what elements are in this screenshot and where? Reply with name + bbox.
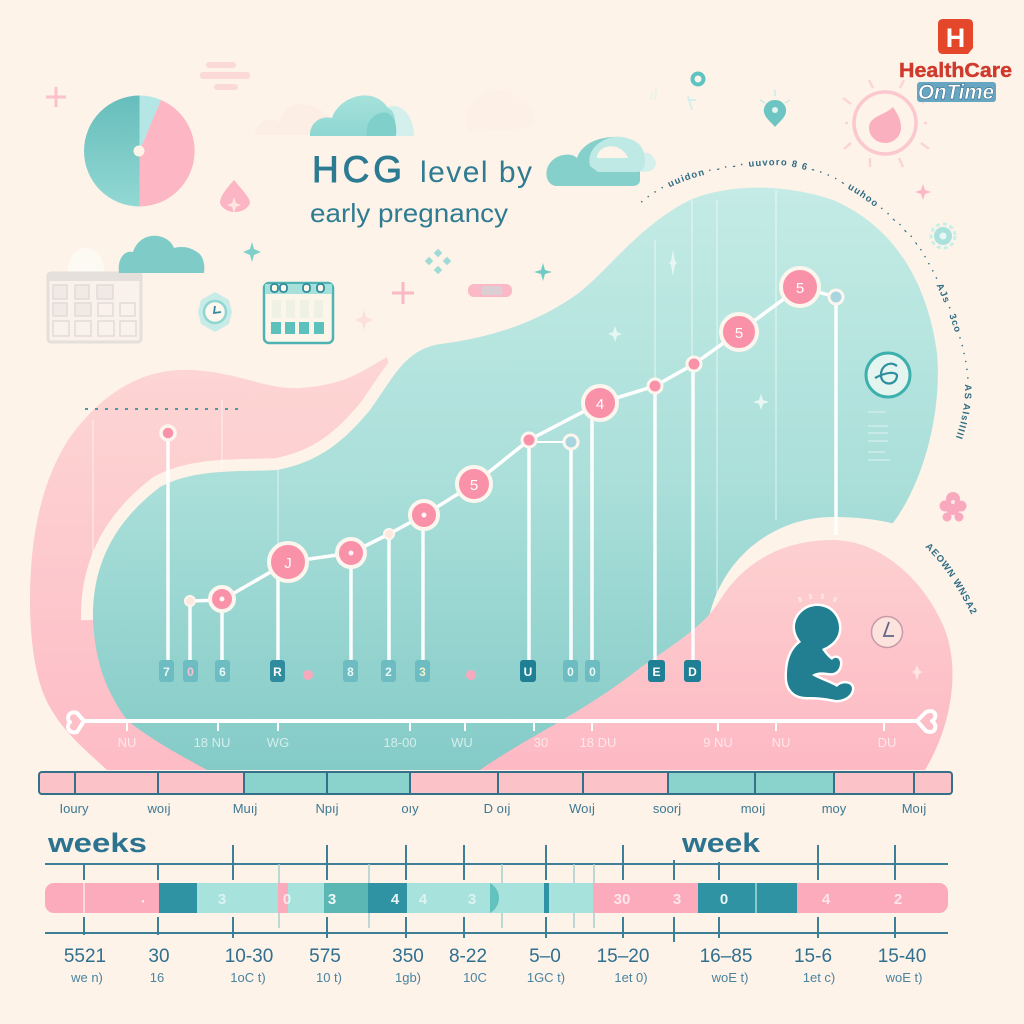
week range captions: 10 t) bbox=[316, 970, 342, 985]
week range captions: 1oC t) bbox=[230, 970, 266, 985]
title: HCG bbox=[312, 149, 402, 190]
logo: HealthCare OnTime: H bbox=[946, 23, 965, 53]
curved caption along the teal blob: AEOWN WNSA2 bbox=[925, 544, 977, 614]
week range numbers: 16–85 bbox=[700, 946, 752, 967]
icon: faint pink clouds bbox=[255, 90, 535, 135]
band values: • bbox=[142, 897, 145, 906]
panel: left pink blob bbox=[30, 357, 420, 770]
axis labels: 18-00 bbox=[383, 735, 417, 750]
axis labels: 18 DU bbox=[580, 735, 616, 750]
line chart: HCG curve bbox=[161, 268, 843, 662]
marker labels: 5 bbox=[470, 477, 478, 494]
month labels: D oıj bbox=[484, 801, 510, 816]
logo: HealthCare OnTime bbox=[899, 19, 1012, 104]
icon: circular teal badge bbox=[866, 353, 910, 397]
title: level by bbox=[420, 156, 532, 189]
week range numbers: 10-30 bbox=[225, 946, 273, 967]
baby rays bbox=[799, 594, 836, 602]
icon: grey calendar with dome bbox=[48, 248, 141, 342]
month labels: soorj bbox=[653, 801, 681, 816]
month labels: Woıj bbox=[569, 801, 595, 816]
week range numbers: 5521 bbox=[64, 946, 106, 967]
month labels: oıy bbox=[401, 801, 419, 816]
icon: ring marker and small glyphs bbox=[651, 74, 704, 110]
month labels: Ioury bbox=[60, 801, 89, 816]
week range captions: 1et c) bbox=[803, 970, 835, 985]
band values: 0 bbox=[283, 891, 291, 908]
icon: teal diamond cluster bbox=[425, 249, 451, 274]
icon: teal cloud top bbox=[310, 95, 414, 136]
chart value chips: 0 bbox=[589, 665, 596, 679]
axis labels: NU bbox=[118, 735, 136, 750]
chart value chips: 8 bbox=[347, 665, 354, 679]
timeline strip: months bbox=[39, 772, 952, 816]
band values: 3 bbox=[673, 891, 681, 908]
icon: drop left bbox=[220, 180, 250, 213]
week range captions: woE t) bbox=[711, 970, 748, 985]
icon: stopwatch bbox=[198, 292, 232, 332]
icon: pie chart bbox=[84, 96, 195, 206]
marker labels bbox=[284, 280, 804, 572]
band values bbox=[142, 891, 902, 908]
week range numbers: 575 bbox=[309, 946, 341, 967]
week range numbers bbox=[64, 946, 926, 967]
chart value chips: 6 bbox=[219, 665, 226, 679]
month labels bbox=[60, 801, 926, 816]
icon: faint pink lines top bbox=[200, 62, 250, 90]
chart stems bbox=[168, 297, 836, 662]
timeline band: weeks bbox=[45, 845, 948, 942]
week range numbers: 15-6 bbox=[794, 946, 832, 967]
week range numbers: 15–20 bbox=[597, 946, 649, 967]
curved caption along the teal blob bbox=[640, 160, 977, 614]
title: early pregnancy bbox=[310, 198, 508, 228]
axis ticks bbox=[127, 721, 884, 731]
marker labels: 5 bbox=[735, 325, 743, 342]
axis labels: NU bbox=[772, 735, 790, 750]
axis labels: 18 NU bbox=[194, 735, 230, 750]
week range captions: 16 bbox=[150, 970, 164, 985]
icon: pink pill bbox=[468, 284, 512, 297]
week range numbers: 30 bbox=[148, 946, 170, 967]
panel: right pink blob with cream outline bbox=[480, 517, 960, 770]
axis labels: 9 NU bbox=[703, 735, 733, 750]
chart value chips bbox=[159, 660, 701, 682]
month labels: Moıj bbox=[902, 801, 926, 816]
week range captions: 1et 0) bbox=[614, 970, 648, 985]
chart horizontal axis bbox=[68, 711, 935, 750]
marker labels: J bbox=[284, 555, 292, 572]
month labels: woıj bbox=[146, 801, 171, 816]
week range captions bbox=[70, 970, 922, 985]
band values: 4 bbox=[391, 891, 400, 908]
scattered sparkles in chart bbox=[608, 250, 922, 680]
heading: week: week bbox=[681, 828, 761, 858]
curved caption along the teal blob: · · · · uuidon · - · - · uuvoro 8 6 - · · · - uuhoo · · - · - · - · · · · · AJs · 3co · · · · · · AS AIsIIIIIGOIS bbox=[640, 160, 972, 440]
week range captions: 1gb) bbox=[395, 970, 421, 985]
icon: cloud beside title bbox=[546, 137, 656, 186]
band values: 4 bbox=[822, 891, 831, 908]
band values: 0 bbox=[720, 891, 728, 908]
week range captions: we n) bbox=[70, 970, 103, 985]
chart value chips: 2 bbox=[385, 665, 392, 679]
chart markers bbox=[161, 268, 843, 611]
icon: pink flower bbox=[940, 492, 966, 522]
week range captions: 1GC t) bbox=[527, 970, 565, 985]
icon: sun with pink drop bbox=[843, 80, 929, 167]
chart value chips: 0 bbox=[567, 665, 574, 679]
side connector to open marker bbox=[529, 441, 571, 443]
axis labels: 30 bbox=[534, 735, 548, 750]
logo: HealthCare OnTime: OnTime bbox=[918, 81, 994, 104]
axis labels: DU bbox=[878, 735, 896, 750]
logo: HealthCare OnTime: HealthCare bbox=[899, 60, 1012, 82]
month labels: Muıj bbox=[233, 801, 257, 816]
chart value chips: D bbox=[688, 665, 697, 679]
icon: small clock bbox=[872, 616, 902, 648]
decorative dashed line on pink bbox=[85, 408, 238, 410]
week range numbers: 5–0 bbox=[529, 946, 561, 967]
chart value chips: U bbox=[524, 665, 532, 679]
month labels: Npıj bbox=[315, 801, 339, 816]
week rails bbox=[45, 845, 948, 942]
icon: baby silhouette bbox=[787, 594, 852, 700]
week range numbers: 15-40 bbox=[878, 946, 926, 967]
band values: 3 bbox=[328, 891, 336, 908]
heading: weeks: weeks bbox=[47, 828, 147, 858]
week range captions: 10C bbox=[463, 970, 487, 985]
faint lines below badge bbox=[868, 412, 890, 460]
marker labels: 4 bbox=[596, 396, 604, 413]
axis labels bbox=[118, 735, 896, 750]
band values: 3 bbox=[468, 891, 476, 908]
band segments bbox=[45, 883, 948, 913]
week range captions: woE t) bbox=[885, 970, 922, 985]
axis labels: WG bbox=[267, 735, 289, 750]
band values: 3 bbox=[218, 891, 226, 908]
icon: teal gear bbox=[931, 224, 955, 248]
marker centre dots bbox=[220, 512, 426, 602]
title bbox=[310, 149, 532, 228]
icon: map pin bbox=[760, 90, 790, 127]
chart value chips: 3 bbox=[419, 665, 426, 679]
chart value chips: 7 bbox=[163, 665, 170, 679]
cream band along the teal blob bbox=[93, 344, 440, 620]
week range numbers: 8-22 bbox=[449, 946, 487, 967]
faint chart grid lines bbox=[93, 190, 776, 600]
chart value chips: R bbox=[273, 665, 282, 679]
chart trend line bbox=[190, 287, 836, 601]
chart value chips: 0 bbox=[187, 665, 194, 679]
marker labels: 5 bbox=[796, 280, 804, 297]
band values: 30 bbox=[614, 891, 630, 908]
icon: sparkles bbox=[46, 87, 931, 330]
month labels: moıj bbox=[741, 801, 765, 816]
month labels: moy bbox=[822, 801, 847, 816]
icon: teal cloud over calendar bbox=[119, 236, 204, 273]
chart value chips: E bbox=[652, 665, 661, 679]
axis labels: WU bbox=[451, 735, 473, 750]
band values: 2 bbox=[894, 891, 902, 908]
icon: teal calendar bbox=[264, 283, 333, 343]
band values: 4 bbox=[419, 891, 428, 908]
panel: teal chart blob bbox=[93, 188, 938, 770]
week range numbers: 350 bbox=[392, 946, 424, 967]
